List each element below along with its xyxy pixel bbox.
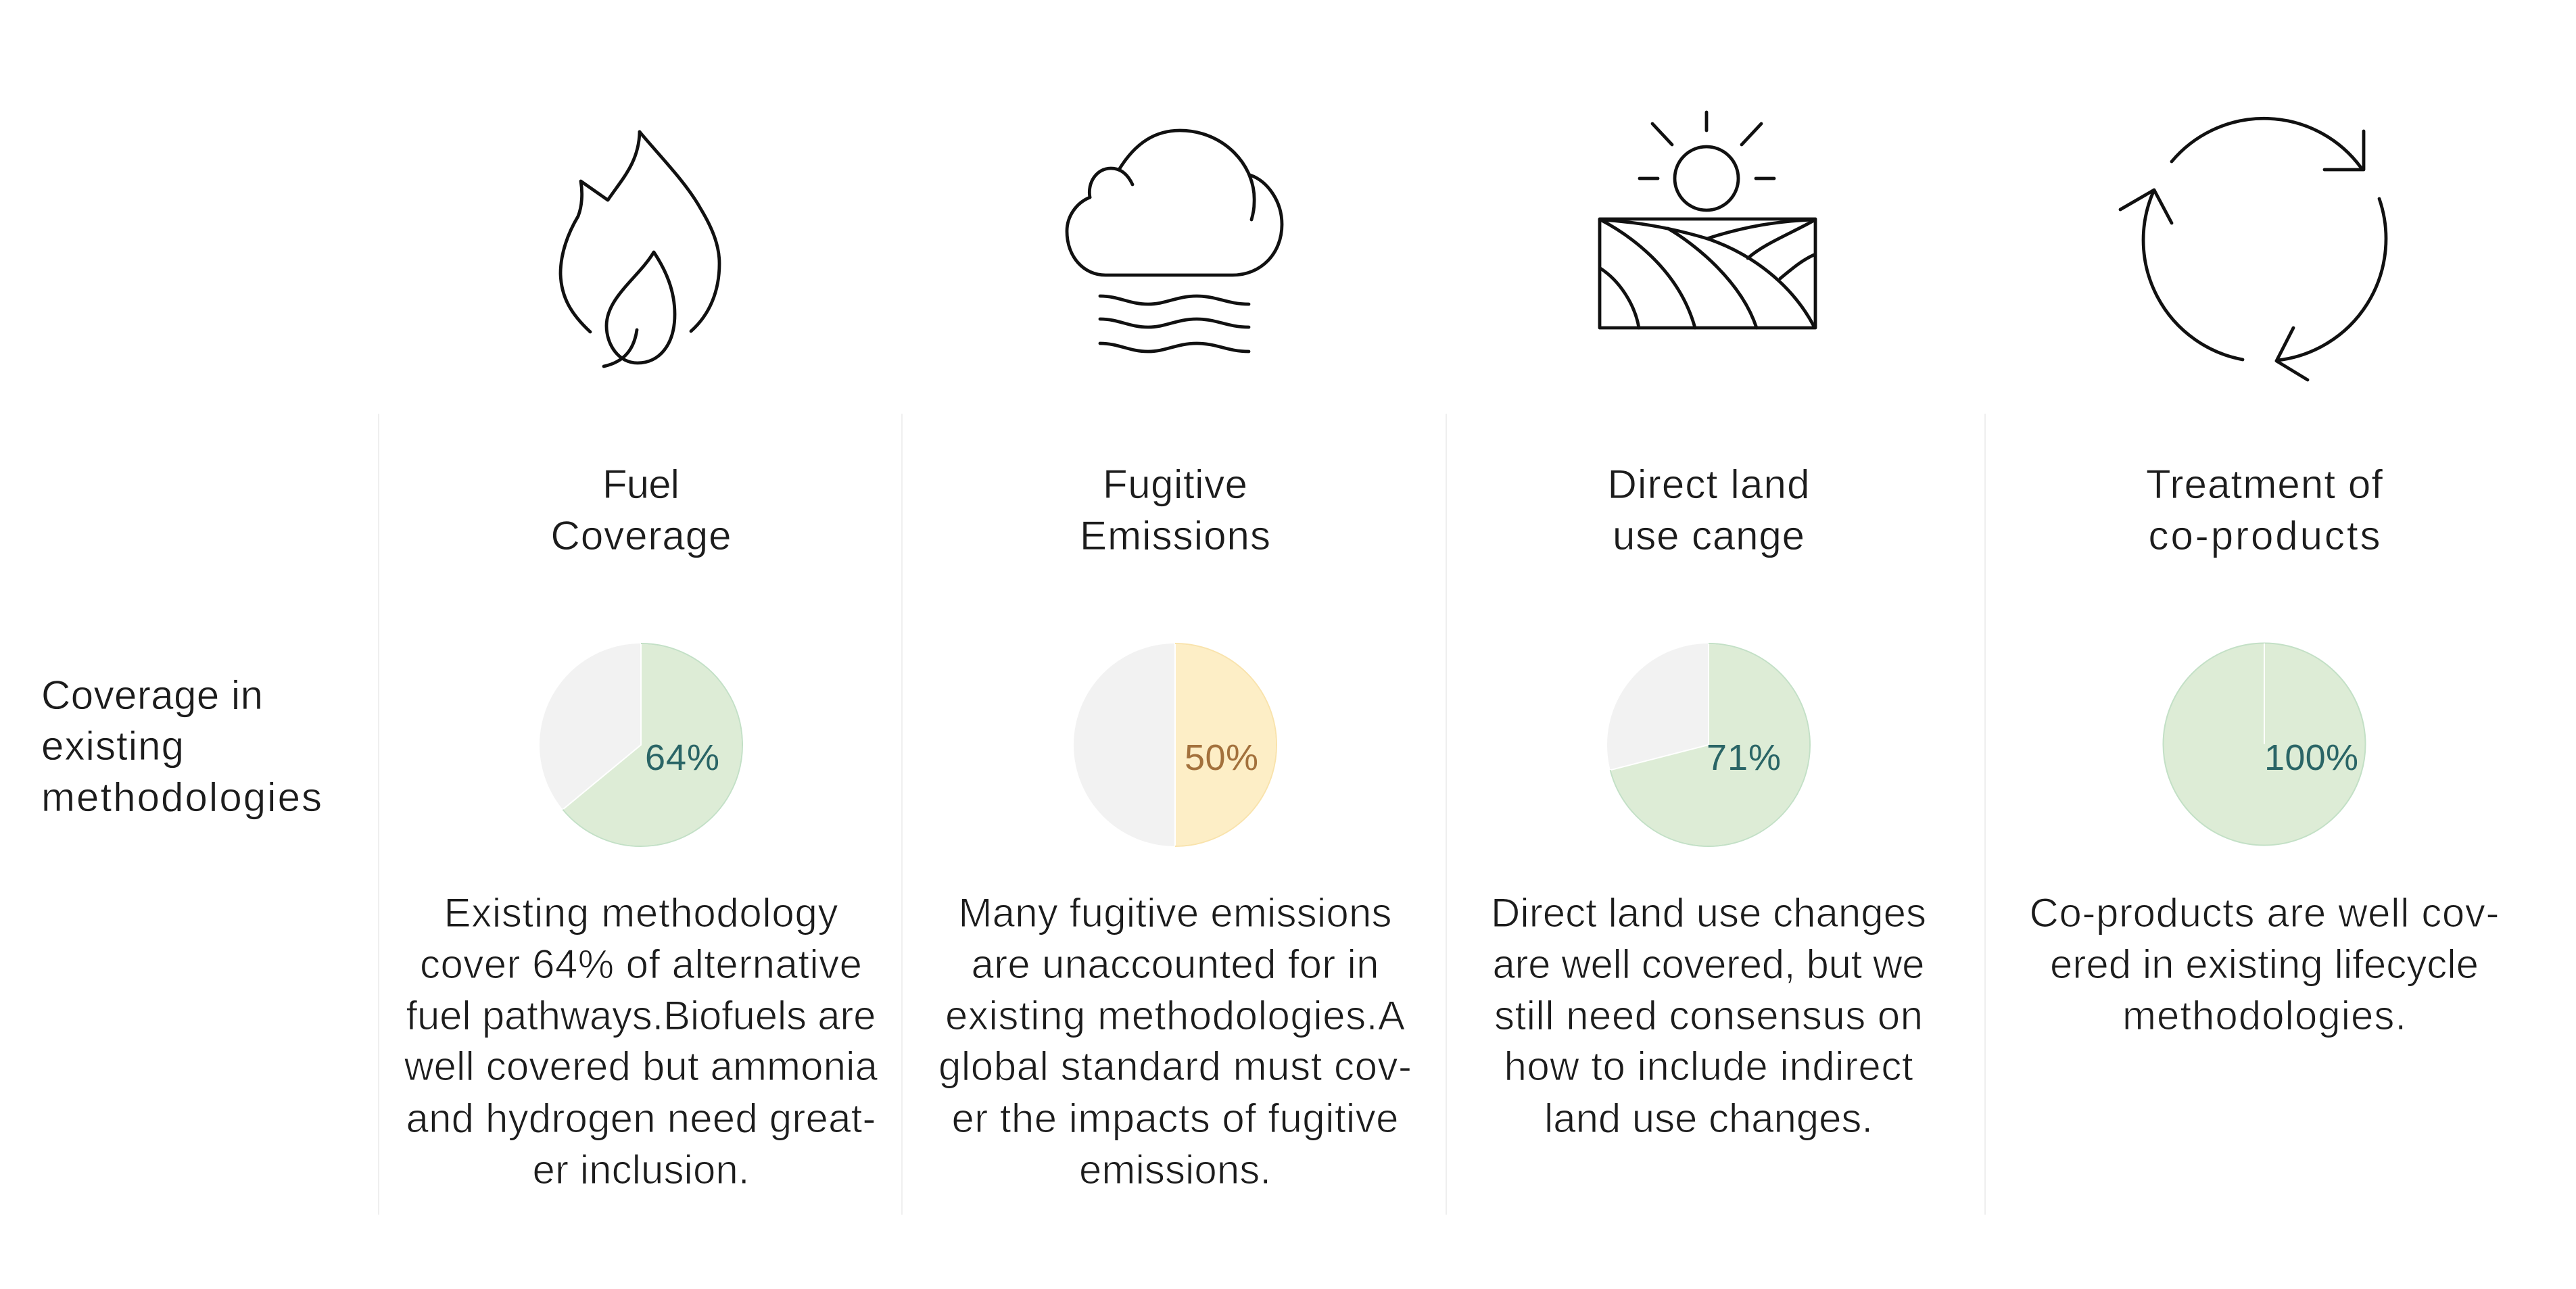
- panel: fuel coverage: [404, 132, 878, 1192]
- heading: fuel coverage: Fuel: [602, 462, 679, 507]
- body text: fuel coverage: fuel pathways.Biofuels are: [406, 993, 876, 1038]
- pie chart: 100%: 100%: [2264, 737, 2358, 778]
- body text: fugitive emissions: er the impacts of fugitive: [952, 1096, 1398, 1141]
- body text: fuel coverage: Existing methodology: [444, 890, 838, 935]
- body text: direct land use change: are well covered, but we: [1493, 942, 1924, 987]
- heading: fugitive emissions: [1080, 462, 1270, 558]
- panel: direct land use change: [1491, 112, 1926, 1141]
- panel: fugitive emissions: [938, 130, 1412, 1192]
- body text: direct land use change: land use changes.: [1544, 1096, 1873, 1141]
- heading: fugitive emissions: Fugitive: [1103, 462, 1247, 507]
- body text: fuel coverage: well covered but ammonia: [404, 1044, 878, 1089]
- body text: treatment of co-products: [2030, 890, 2499, 1038]
- pie chart: 50%: 50%: [1185, 737, 1258, 778]
- pie chart: 50%: [1074, 643, 1277, 846]
- body text: fugitive emissions: global standard must cov-: [938, 1044, 1412, 1089]
- heading: treatment of co-products: co-products: [2149, 513, 2380, 558]
- body text: treatment of co-products: methodologies.: [2122, 993, 2406, 1038]
- heading: treatment of co-products: [2146, 462, 2383, 558]
- row label: coverage in existing methodologies: [41, 673, 322, 820]
- body text: direct land use change: Direct land use changes: [1491, 890, 1926, 935]
- body text: fugitive emissions: emissions.: [1079, 1147, 1271, 1192]
- heading: fugitive emissions: Emissions: [1080, 513, 1270, 558]
- row label: coverage in existing methodologies: Coverage in: [41, 673, 263, 718]
- icon: cloud with haze: [1067, 130, 1282, 351]
- body text: fuel coverage: er inclusion.: [533, 1147, 749, 1192]
- heading: treatment of co-products: Treatment of: [2146, 462, 2383, 507]
- heading: direct land use change: Direct land: [1608, 462, 1809, 507]
- body text: fugitive emissions: are unaccounted for in: [971, 942, 1379, 987]
- body text: direct land use change: [1491, 890, 1926, 1141]
- row label: coverage in existing methodologies: existing: [41, 723, 184, 769]
- pie chart: 71%: 71%: [1707, 737, 1781, 778]
- icon: flame: [560, 132, 719, 366]
- body text: fuel coverage: [404, 890, 878, 1192]
- heading: direct land use change: [1608, 462, 1809, 558]
- pie chart: 64%: 64%: [645, 737, 719, 778]
- body text: fugitive emissions: [938, 890, 1412, 1192]
- heading: fuel coverage: Coverage: [550, 513, 732, 558]
- body text: fuel coverage: cover 64% of alternative: [420, 942, 862, 987]
- pie chart: 64%: [540, 643, 742, 846]
- heading: direct land use change: use cange: [1613, 513, 1805, 558]
- body text: treatment of co-products: ered in existing lifecycle: [2050, 942, 2479, 987]
- body text: fugitive emissions: existing methodologies.A: [945, 993, 1405, 1038]
- icon: recycling arrows: [2120, 118, 2386, 380]
- body text: fugitive emissions: Many fugitive emissions: [959, 890, 1391, 935]
- body text: treatment of co-products: Co-products are well cov-: [2030, 890, 2499, 935]
- body text: fuel coverage: and hydrogen need great-: [406, 1096, 876, 1141]
- pie chart: 71%: [1607, 643, 1810, 846]
- row label: coverage in existing methodologies: methodologies: [41, 775, 322, 820]
- body text: direct land use change: how to include indirect: [1504, 1044, 1913, 1089]
- panel: treatment of co-products: [2030, 118, 2499, 1038]
- pie chart: 100%: [2164, 643, 2365, 845]
- icon: sun over fields: [1600, 112, 1815, 328]
- body text: direct land use change: still need consensus on: [1494, 993, 1923, 1038]
- heading: fuel coverage: [550, 462, 732, 558]
